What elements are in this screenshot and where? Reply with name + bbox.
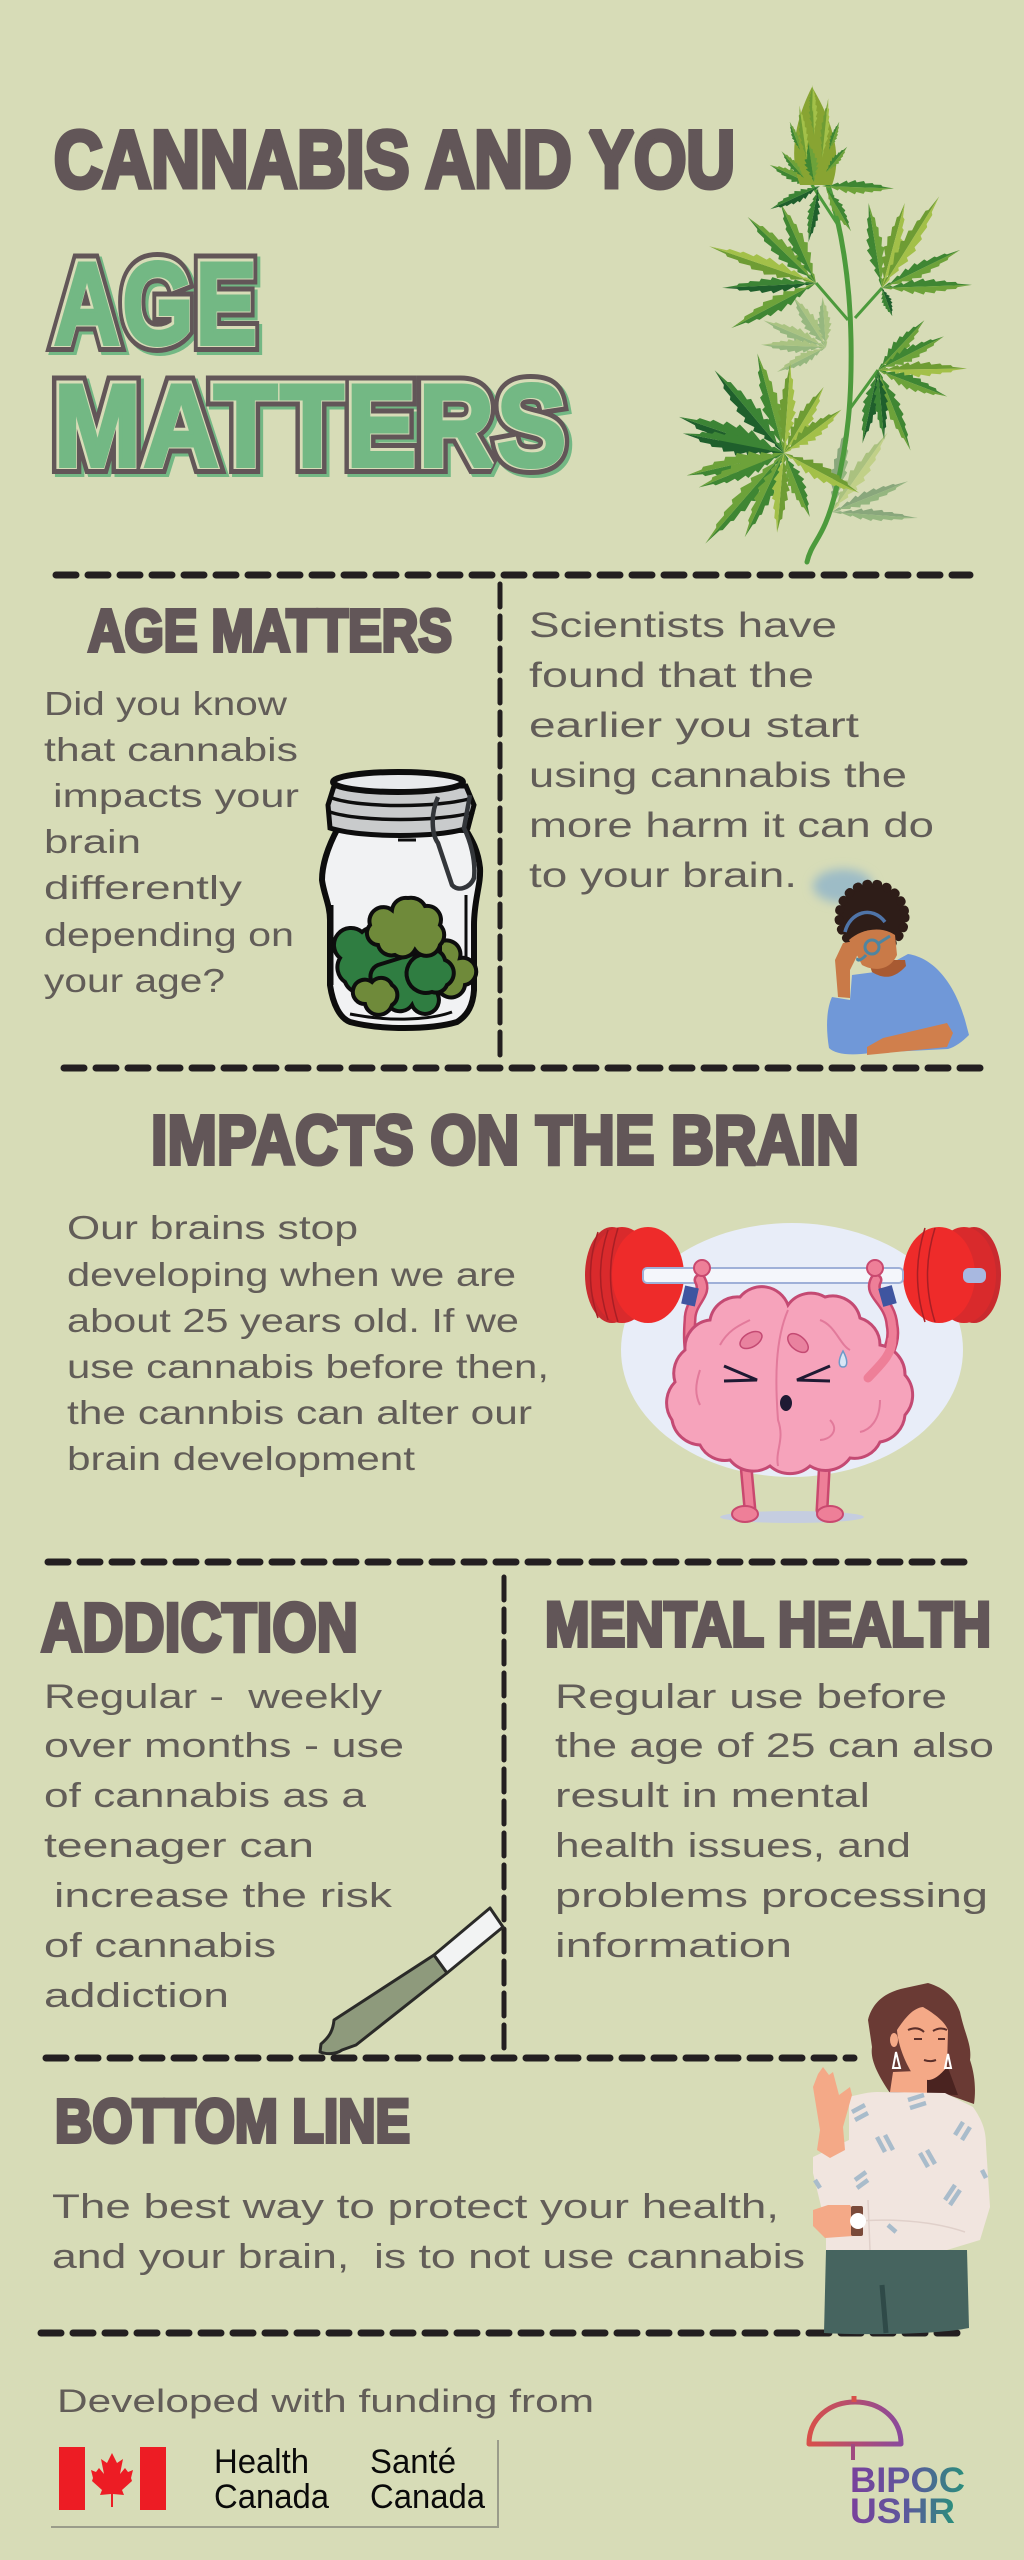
text: mental health <box>555 1678 994 1965</box>
brain body <box>667 1287 913 1474</box>
text: scientists have found: more harm it can do <box>529 806 934 845</box>
face <box>724 1351 847 1411</box>
title: age matters: AGE <box>53 237 258 368</box>
heading: bottom line: BOTTOM LINE <box>55 2087 410 2155</box>
title: age matters: AGE <box>56 240 261 371</box>
bar <box>643 1268 903 1283</box>
heading: age matters: AGE MATTERS <box>88 598 452 664</box>
stem <box>807 185 851 562</box>
text: addiction: Regular - weekly <box>44 1678 382 1716</box>
text: did you know: impacts your <box>53 777 299 814</box>
text: our brains: use cannabis before then, <box>67 1348 549 1385</box>
text: mental health: problems processing <box>555 1877 988 1915</box>
text: bottom line: The best way to protect your health, <box>52 2188 779 2226</box>
hair <box>839 884 905 950</box>
ear and earrings <box>890 2033 951 2068</box>
facial features <box>908 2028 947 2061</box>
text: did you know: differently <box>44 869 243 906</box>
text: bottom line <box>52 2188 805 2276</box>
title: cannabis and you: CANNABIS AND YOU <box>54 115 735 205</box>
text: our brains <box>67 1209 549 1477</box>
divider <box>502 1577 506 2048</box>
divider <box>41 2330 961 2336</box>
wordmark: Canada <box>214 2478 329 2516</box>
divider <box>48 1558 970 1566</box>
right weight <box>903 1227 1001 1323</box>
backdrop <box>621 1223 963 1477</box>
heading: impacts on the brain: IMPACTS ON THE BRAIN <box>151 1101 859 1179</box>
text: scientists have found: Scientists have <box>529 606 837 645</box>
arms <box>688 1260 893 1378</box>
brain spots <box>737 1328 812 1356</box>
text: mental health: the age of 25 can also <box>555 1727 994 1765</box>
text: mental health: health issues, and <box>555 1827 911 1865</box>
flower head <box>767 85 894 243</box>
face <box>849 930 897 969</box>
skirt <box>824 2250 969 2334</box>
text: mental health: Regular use before <box>555 1678 947 1716</box>
text: scientists have found: found that the <box>529 656 814 695</box>
text: mental health: information <box>555 1927 792 1965</box>
text: addiction: teenager can <box>44 1827 314 1865</box>
canadian flag <box>59 2447 166 2510</box>
wordmark: USHR <box>850 2492 955 2531</box>
icon: cannabis jar <box>322 772 480 1028</box>
logo: bipoc ushr <box>809 2396 965 2531</box>
text: our brains: about 25 years old. If we <box>67 1302 519 1339</box>
logo: health canada <box>51 2440 498 2527</box>
worry cloud <box>813 869 873 903</box>
text: scientists have found: to your brain. <box>529 856 797 895</box>
text: did you know <box>44 685 299 999</box>
text: scientists have found: using cannabis the <box>529 756 907 795</box>
brain folds <box>696 1310 880 1466</box>
text: addiction <box>44 1678 404 2015</box>
divider <box>64 1064 986 1072</box>
text: addiction: over months - use <box>44 1727 404 1765</box>
jar lid <box>328 772 474 836</box>
divider <box>46 2054 854 2062</box>
icon: person with headache <box>813 869 969 1055</box>
text: did you know: that cannabis <box>44 731 298 768</box>
forearm <box>867 1023 953 1055</box>
text: did you know: depending on <box>44 916 294 953</box>
cannabis buds <box>334 898 476 1015</box>
wordmark: BIPOC <box>850 2461 965 2500</box>
title: age matters <box>53 237 571 493</box>
text: addiction: of cannabis as a <box>44 1777 366 1815</box>
shirt <box>813 2092 990 2250</box>
icon: cannabis plant <box>675 85 972 562</box>
title: age matters: AGE <box>53 237 258 368</box>
neck <box>868 960 906 977</box>
text: our brains: developing when we are <box>67 1256 516 1293</box>
text: addiction: increase the risk <box>54 1877 393 1915</box>
heading: addiction: ADDICTION <box>41 1589 358 1666</box>
legs <box>732 1455 843 1522</box>
wordmark: Canada <box>370 2478 485 2516</box>
upper left leaf cluster <box>706 199 824 336</box>
sweater <box>827 954 969 1054</box>
umbrella <box>809 2396 901 2460</box>
jar clasp <box>433 795 474 889</box>
title: age matters: AGE <box>54 238 259 369</box>
raised arm <box>835 941 860 998</box>
text: did you know: brain <box>44 823 141 860</box>
text: developed with funding: Developed with funding from <box>57 2383 594 2419</box>
text: our brains: the cannbis can alter our <box>67 1394 532 1431</box>
glasses <box>858 936 890 960</box>
lower leaf cluster <box>675 351 863 550</box>
text: bottom line: and your brain, is to not use cannabis <box>52 2238 805 2276</box>
text: scientists have found <box>529 606 934 895</box>
face <box>897 2007 948 2080</box>
text: addiction: addiction <box>44 1977 229 2015</box>
restore arm end over body <box>868 1340 892 1378</box>
icon: brain lifting barbell <box>585 1223 1001 1523</box>
left weight <box>585 1227 684 1323</box>
divider <box>498 584 502 1055</box>
divider <box>56 572 970 578</box>
text: our brains: Our brains stop <box>67 1209 358 1246</box>
wordmark <box>850 2461 965 2531</box>
title: age matters: MATTERS <box>53 359 568 490</box>
sleeve edge <box>826 2200 965 2250</box>
raised hand <box>813 2067 852 2158</box>
headband <box>845 912 885 932</box>
text: addiction: of cannabis <box>44 1927 276 1965</box>
shirt pattern <box>815 2095 986 2232</box>
text: mental health: result in mental <box>555 1777 870 1815</box>
icon: woman gesturing stop <box>813 1983 990 2334</box>
neck <box>890 2070 946 2094</box>
hair <box>868 1983 975 2104</box>
wordmark <box>214 2443 485 2516</box>
upper right leaf cluster <box>860 192 972 318</box>
floor shadow <box>720 1511 864 1523</box>
wordmark: Health <box>214 2443 309 2481</box>
faded leaves <box>761 292 918 524</box>
fist and watch <box>813 2205 866 2238</box>
title: age matters: MATTERS <box>54 360 569 491</box>
icon: joint <box>320 1908 503 2054</box>
title: age matters: MATTERS <box>53 359 568 490</box>
title: age matters: MATTERS <box>56 362 571 493</box>
text: scientists have found: earlier you start <box>529 706 859 745</box>
text: our brains: brain development <box>67 1440 415 1477</box>
text: did you know: Did you know <box>44 685 287 722</box>
text: did you know: your age? <box>44 962 225 999</box>
middle right leaf cluster <box>854 315 967 454</box>
wordmark: Santé <box>370 2443 456 2481</box>
